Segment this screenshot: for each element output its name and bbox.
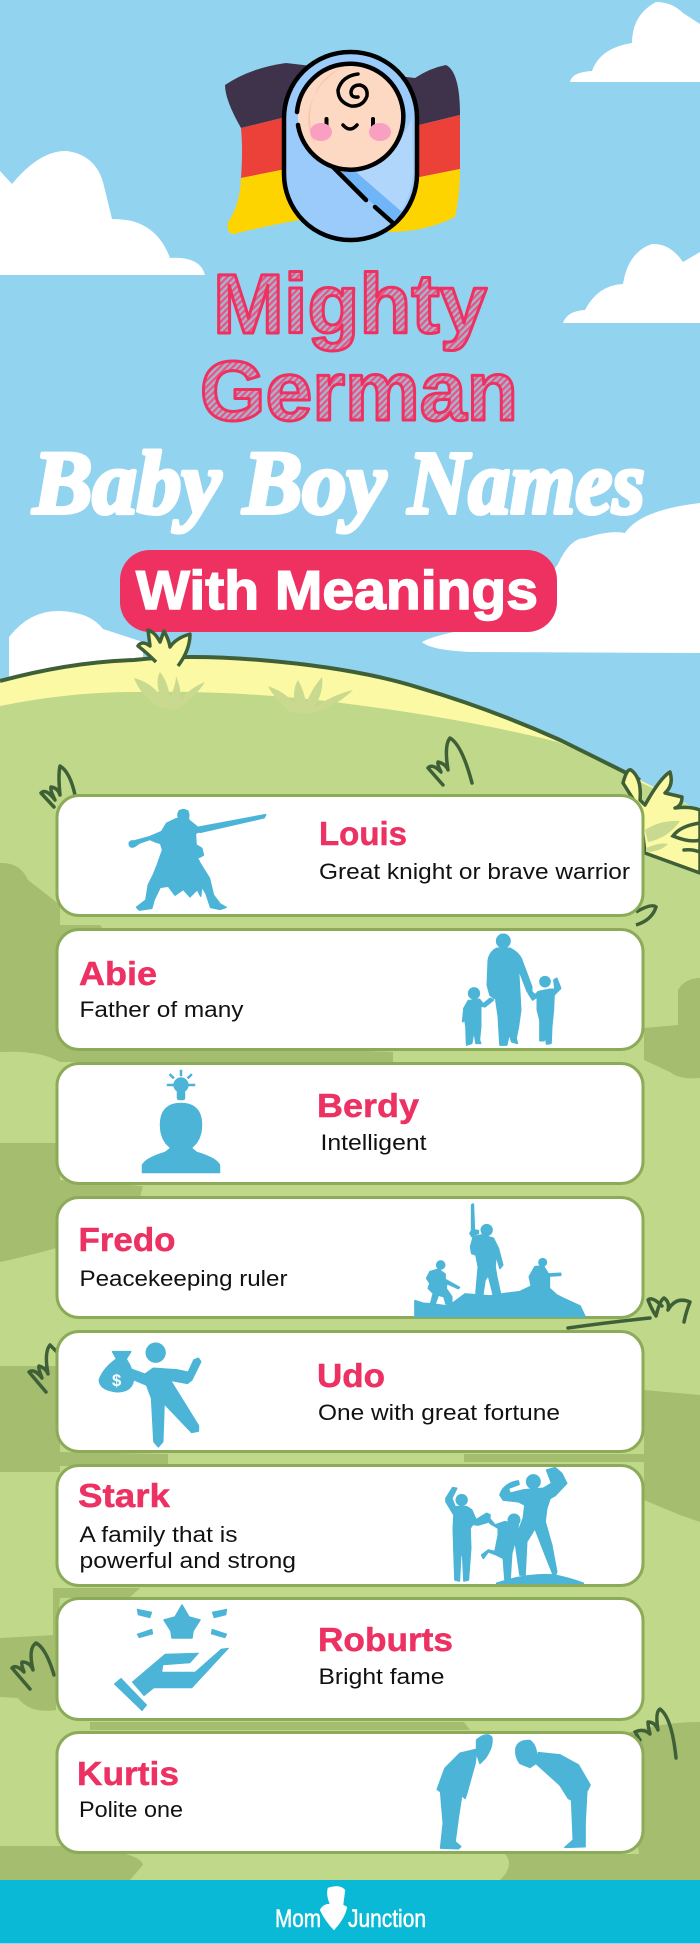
name: Abie: Abie — [79, 955, 157, 992]
name: Kurtis: Kurtis — [77, 1755, 179, 1792]
meaning: Stark — [80, 1522, 296, 1573]
panel: Udo — [57, 1332, 643, 1452]
panel: Louis — [57, 796, 643, 916]
name: Fredo: Fredo — [78, 1221, 176, 1258]
icon: german flag — [225, 63, 460, 234]
title: Baby Boy Names: Boy — [242, 434, 387, 533]
title: German: German — [200, 344, 518, 438]
panel: Fredo — [57, 1198, 643, 1318]
meaning: Kurtis: Polite one — [79, 1797, 183, 1822]
icon: father with children — [463, 934, 561, 1045]
meaning: Stark: A family that is — [80, 1522, 238, 1547]
flag and baby icon — [225, 52, 460, 240]
subtitle pill: With Meanings: With Meanings — [136, 559, 538, 621]
title: Baby Boy Names: Names — [407, 434, 645, 533]
panel: Kurtis — [57, 1732, 643, 1852]
logo: MomJunction: Mom — [275, 1905, 321, 1933]
footer bar — [0, 1880, 700, 1943]
meaning: Stark: powerful and strong — [80, 1548, 296, 1573]
small tufts — [12, 738, 690, 1758]
icon: two people bowing — [437, 1735, 590, 1849]
title: Baby Boy Names: Baby — [32, 434, 222, 533]
icon: man with money bag — [99, 1343, 201, 1447]
icon: knight silhouette — [129, 810, 266, 910]
icon: person with light bulb — [142, 1070, 220, 1173]
meaning: Berdy: Intelligent — [320, 1130, 426, 1155]
name: Louis: Louis — [319, 815, 407, 852]
name: Udo: Udo — [317, 1357, 385, 1394]
name: Berdy: Berdy — [317, 1087, 420, 1124]
tuft: yellow grass on hilltop — [138, 630, 190, 666]
icon: soldiers on hill — [415, 1204, 585, 1317]
meaning: Udo: One with great fortune — [318, 1400, 560, 1425]
subtitle pill: With Meanings — [120, 550, 557, 632]
title: Mighty: Mighty — [213, 257, 487, 351]
name: Roburts: Roburts — [318, 1621, 453, 1658]
title: Baby Boy Names — [32, 434, 645, 533]
icon: man with money bag: $ — [112, 1371, 122, 1390]
panel: Abie — [57, 930, 643, 1050]
icon: strong family — [446, 1468, 583, 1583]
panel: Stark — [57, 1466, 643, 1586]
name: Stark: Stark — [78, 1477, 171, 1514]
meaning: Roburts: Bright fame — [318, 1664, 444, 1689]
meaning: Fredo: Peacekeeping ruler — [80, 1266, 288, 1291]
meaning: Louis: Great knight or brave warrior — [319, 859, 630, 884]
pale grass on hill — [134, 672, 353, 714]
logo: MomJunction — [275, 1886, 426, 1933]
icon: swaddled baby — [284, 52, 417, 240]
hill background — [0, 657, 700, 1880]
panel: Roburts — [57, 1598, 643, 1720]
panel: Berdy — [57, 1064, 643, 1184]
background shadow patches — [0, 863, 700, 1880]
logo: MomJunction: Junction — [348, 1905, 426, 1933]
tuft: yellow grass right — [623, 770, 700, 925]
meaning: Abie: Father of many — [80, 997, 244, 1022]
clouds — [0, 2, 700, 680]
icon: hand holding star — [114, 1605, 229, 1711]
